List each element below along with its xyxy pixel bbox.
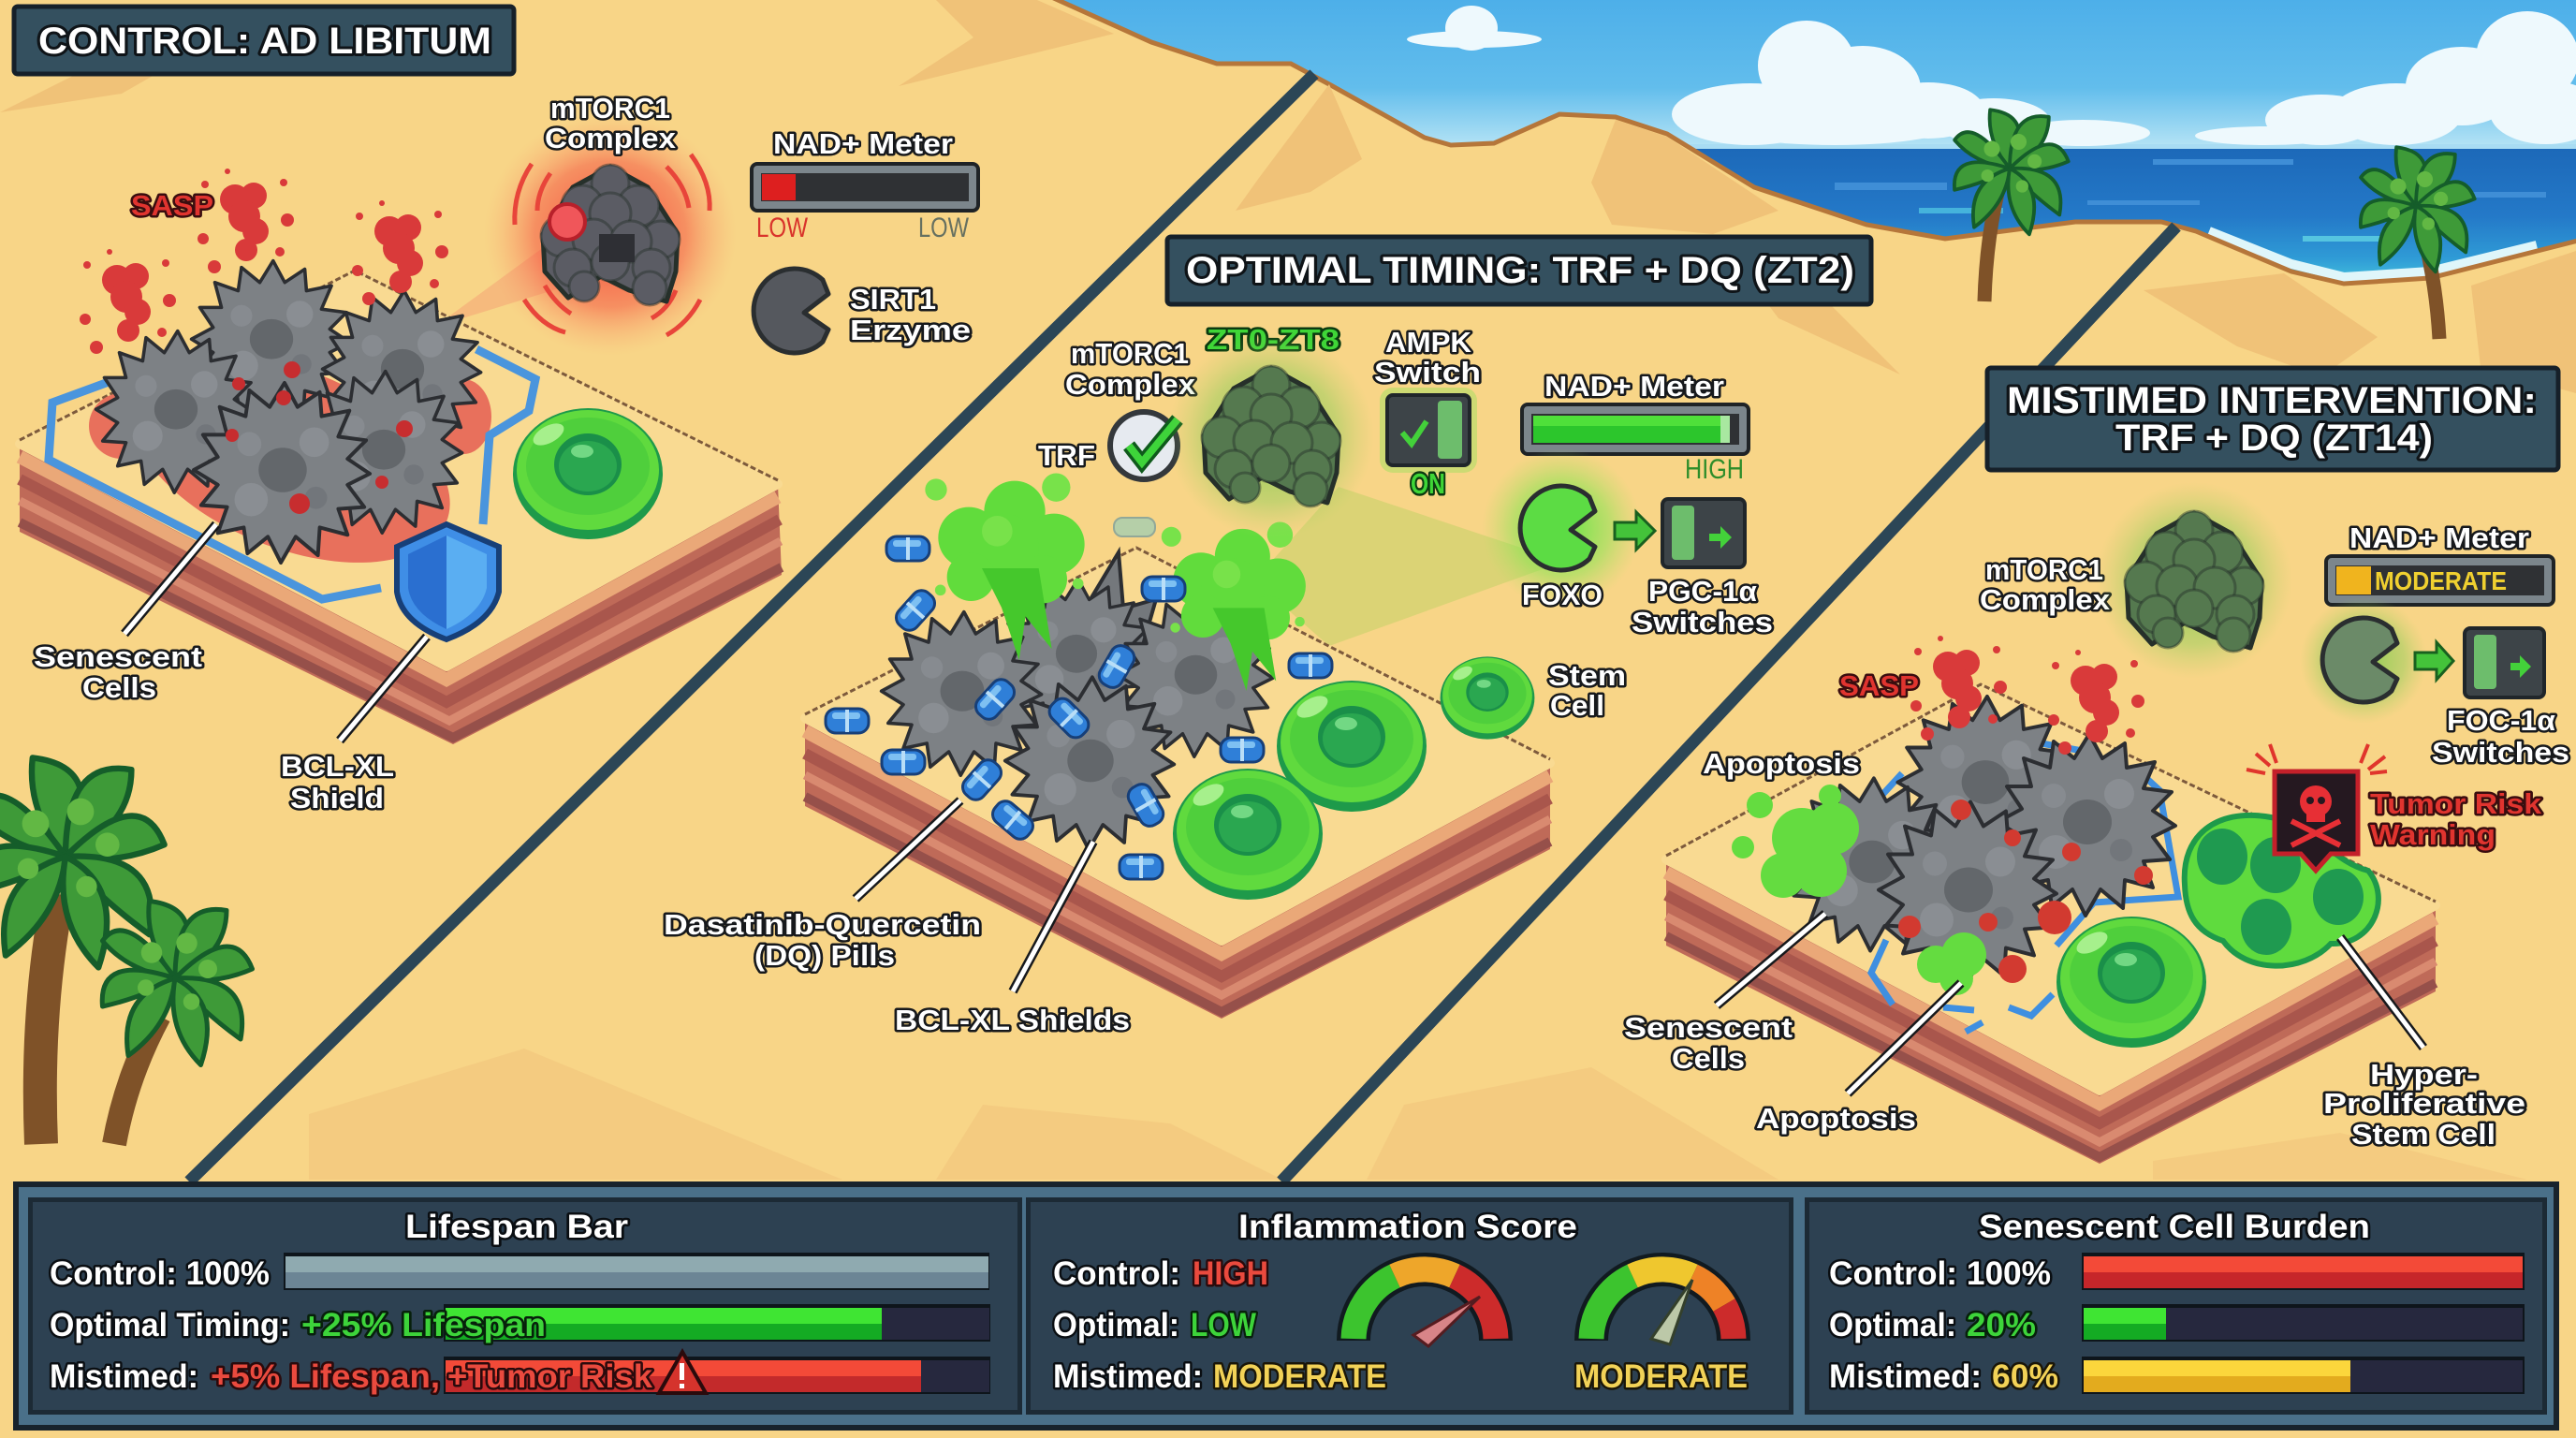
palm tree: right 2 <box>2361 147 2475 339</box>
heading: senescent cell burden: Senescent Cell Burden <box>1979 1209 2370 1245</box>
title: optimal <box>1167 237 1871 304</box>
label: gauge moderate: MODERATE <box>1574 1358 1748 1395</box>
panel: lifespan bar <box>28 1197 1022 1415</box>
icon: PGC-1a switch <box>2465 628 2544 697</box>
isometric platform: optimal <box>805 548 1550 1019</box>
label: PGC-1a switches: PGC-1α <box>1648 575 1757 608</box>
label: FOC-1a switches: Switches <box>2432 736 2569 769</box>
green apoptosis remnants <box>1732 785 1986 995</box>
background: horizon and surf <box>1404 144 2576 277</box>
panel: mistimed intervention <box>1624 368 2569 1164</box>
row: control lifespan <box>50 1253 989 1292</box>
row: control burden <box>1829 1253 2525 1292</box>
senescent cells cluster <box>1787 697 2175 983</box>
NAD+ meter high: NAD+ Meter <box>1544 370 1724 403</box>
label: mTORC1 complex: mTORC1 <box>1985 553 2103 586</box>
background: sea <box>1404 146 2576 286</box>
label: AMPK switch: Switch <box>1374 356 1481 389</box>
divider: control to optimal <box>189 74 1314 1181</box>
background: sky <box>0 0 2576 146</box>
NAD+ meter high: HIGH <box>1685 454 1744 485</box>
icon: SIRT1 partial activation <box>2300 596 2427 724</box>
row: optimal LOW: LOW <box>1191 1307 1256 1343</box>
label: apoptosis upper: Apoptosis <box>1703 747 1860 780</box>
row: mistimed MODERATE: Mistimed: <box>1053 1358 1203 1395</box>
label: senescent cells: Cells <box>82 671 156 704</box>
label: mTORC1 complex: mTORC1 <box>550 92 670 125</box>
senescent cells damaged <box>882 552 1273 850</box>
title: control <box>14 7 514 74</box>
red damage dots <box>226 361 413 514</box>
NAD+ meter low: NAD+ Meter <box>773 127 953 160</box>
label: hyper-proliferative stem cell: Proliferative <box>2323 1087 2525 1120</box>
icon: PGC-1a switch <box>1662 499 1745 567</box>
label: AMPK switch: AMPK <box>1385 326 1472 359</box>
blue membrane fragments <box>1871 741 2178 1032</box>
gauge: mistimed moderate <box>1591 1269 1734 1344</box>
icon: SIRT1 enzyme <box>754 269 828 353</box>
row: control burden: Control: 100% <box>1829 1255 2051 1292</box>
label: BCL-XL shields: BCL-XL Shields <box>895 1004 1130 1036</box>
leader: BCL-XL shields <box>1013 842 1093 991</box>
row: mistimed burden: Mistimed: <box>1829 1358 1982 1395</box>
row: optimal burden: Optimal: <box>1829 1307 1956 1343</box>
label: stem cell: Stem <box>1548 659 1626 692</box>
label: SASP: SASP <box>1839 669 1919 702</box>
NAD+ meter low: LOW <box>918 213 970 243</box>
label: tumor risk warning: Warning <box>2370 818 2496 851</box>
row: optimal burden <box>1829 1304 2525 1343</box>
label: tumor risk warning: Tumor Risk <box>2370 787 2542 820</box>
pale green cone <box>1254 487 1563 646</box>
label: ZT0-ZT8: ZT0-ZT8 <box>1207 323 1339 356</box>
clouds <box>1407 6 2576 146</box>
label: apoptosis lower: Apoptosis <box>1756 1102 1916 1135</box>
NAD+ meter moderate: MODERATE <box>2375 566 2507 595</box>
NAD+ meter low: LOW <box>756 213 809 243</box>
heading: lifespan bar: Lifespan Bar <box>405 1209 628 1245</box>
NAD+ meter moderate <box>2326 521 2554 605</box>
label: mTORC1 complex: Complex <box>1980 583 2111 616</box>
stem cell <box>513 408 663 539</box>
row: mistimed lifespan <box>50 1352 990 1395</box>
dashboard frame <box>13 1181 2559 1431</box>
label: ON: ON <box>1411 467 1445 500</box>
label: PGC-1a switches: Switches <box>1632 606 1773 638</box>
label: TRF: TRF <box>1038 439 1095 472</box>
label: SASP: SASP <box>131 189 213 222</box>
mTOR pale red cone <box>440 234 674 323</box>
label: mTORC1 complex: Complex <box>545 122 677 154</box>
title: mistimed: TRF + DQ (ZT14) <box>2115 418 2433 459</box>
icon: mTORC1 complex <box>2096 482 2292 679</box>
label: hyper-proliferative stem cell: Hyper- <box>2370 1058 2478 1091</box>
row: control HIGH <box>1053 1255 1268 1292</box>
row: control HIGH: HIGH <box>1193 1255 1268 1292</box>
palm tree: left large <box>0 757 165 1144</box>
title: mistimed <box>1987 368 2558 470</box>
icon: tumor risk warning <box>2247 744 2387 871</box>
row: mistimed lifespan: +5% Lifespan, <box>211 1358 440 1395</box>
leader: BCL-XL shield <box>340 637 427 741</box>
gauge: control high <box>1354 1269 1496 1346</box>
icon: TRF clock with check <box>1110 412 1178 479</box>
NAD+ meter high <box>1522 370 1749 485</box>
icon: AMPK switch on <box>1380 388 1477 473</box>
divider: optimal to mistimed <box>1281 227 2176 1181</box>
label: BCL-XL shield: BCL-XL <box>281 750 394 783</box>
row: mistimed burden <box>1829 1357 2525 1395</box>
row: mistimed lifespan: Mistimed: <box>50 1358 198 1395</box>
row: optimal lifespan <box>50 1304 990 1343</box>
label: SIRT1 enzyme: Erzyme <box>850 314 971 346</box>
SASP particles <box>1910 636 2144 755</box>
green apoptosis bursts <box>925 474 1306 691</box>
row: mistimed lifespan: +Tumor Risk <box>447 1358 653 1395</box>
leader: senescent cells <box>124 524 216 634</box>
panel: control ad libitum <box>14 7 978 814</box>
row: mistimed MODERATE: MODERATE <box>1213 1358 1386 1395</box>
label: senescent cells: Senescent <box>34 640 202 673</box>
background: lower dune shading <box>309 1049 2527 1180</box>
leader: apoptosis <box>1848 983 1961 1093</box>
background: dune shading <box>0 0 2576 393</box>
label: DQ pills: (DQ) Pills <box>754 939 895 972</box>
label: senescent cells: Senescent <box>1624 1011 1793 1044</box>
palm tree: left small <box>102 901 253 1144</box>
SASP particles <box>80 169 448 354</box>
label: hyper-proliferative stem cell: Stem Cell <box>2351 1118 2496 1151</box>
title: mistimed: MISTIMED INTERVENTION: <box>2007 380 2537 421</box>
leader: DQ pills <box>856 800 960 899</box>
title: control: CONTROL: AD LIBITUM <box>38 21 491 62</box>
heading: inflammation score: Inflammation Score <box>1238 1209 1577 1245</box>
row: optimal burden: 20% <box>1967 1307 2036 1343</box>
row: optimal LOW: Optimal: <box>1053 1307 1179 1343</box>
label: BCL-XL shield: Shield <box>290 782 384 814</box>
red damage marks <box>1898 800 2153 983</box>
panel: senescent cell burden <box>1805 1197 2547 1415</box>
bottom dashboard <box>13 1181 2559 1431</box>
label: DQ pills: Dasatinib-Quercetin <box>664 908 981 941</box>
hyper-proliferative stem cell <box>2185 815 2378 966</box>
senescent cells cluster <box>96 261 481 563</box>
label: mTORC1 complex: Complex <box>1065 368 1196 401</box>
blue membrane <box>49 349 535 599</box>
row: mistimed MODERATE <box>1053 1358 1386 1395</box>
row: control lifespan: Control: 100% <box>50 1255 270 1292</box>
NAD+ meter moderate: NAD+ Meter <box>2349 521 2529 554</box>
isometric platform: control <box>20 271 782 744</box>
icon: mTORC1 complex activated <box>484 112 737 356</box>
label: mTORC1 complex: mTORC1 <box>1071 337 1189 370</box>
label: FOXO: FOXO <box>1522 579 1603 611</box>
title: optimal: OPTIMAL TIMING: TRF + DQ (ZT2) <box>1186 250 1854 291</box>
leader: hyper-proliferative stem cell <box>2340 937 2423 1048</box>
label: senescent cells: Cells <box>1672 1042 1745 1075</box>
row: control HIGH: Control: <box>1053 1255 1180 1292</box>
label: stem cell: Cell <box>1550 689 1604 722</box>
icon: mTORC1 complex inhibited <box>1168 332 1374 538</box>
row: optimal LOW <box>1053 1307 1256 1343</box>
row: optimal lifespan: +25% Lifespan <box>301 1307 546 1343</box>
DQ pills <box>826 518 1332 879</box>
label: FOC-1a switches: FOC-1α <box>2447 704 2555 737</box>
isometric platform: mistimed <box>1666 684 2436 1164</box>
palm tree: right 1 <box>1954 110 2069 301</box>
arrow: FOXO to PGC-1a <box>1615 512 1655 550</box>
label: SIRT1 enzyme: SIRT1 <box>850 283 936 315</box>
stem cell <box>2056 917 2206 1048</box>
red inflammation goo <box>89 313 491 605</box>
panel: inflammation score <box>1026 1197 1793 1415</box>
row: mistimed burden: 60% <box>1992 1358 2058 1395</box>
arrow: enzyme to switch <box>2415 642 2453 680</box>
row: optimal lifespan: Optimal Timing: <box>50 1307 290 1343</box>
leader: senescent cells <box>1717 914 1825 1005</box>
NAD+ meter low <box>752 127 978 243</box>
panel: optimal timing <box>664 237 1871 1036</box>
icon: FOXO enzyme glowing <box>1482 448 1641 608</box>
stem cells <box>1173 656 1534 900</box>
icon: BCL-XL shield <box>397 524 499 639</box>
